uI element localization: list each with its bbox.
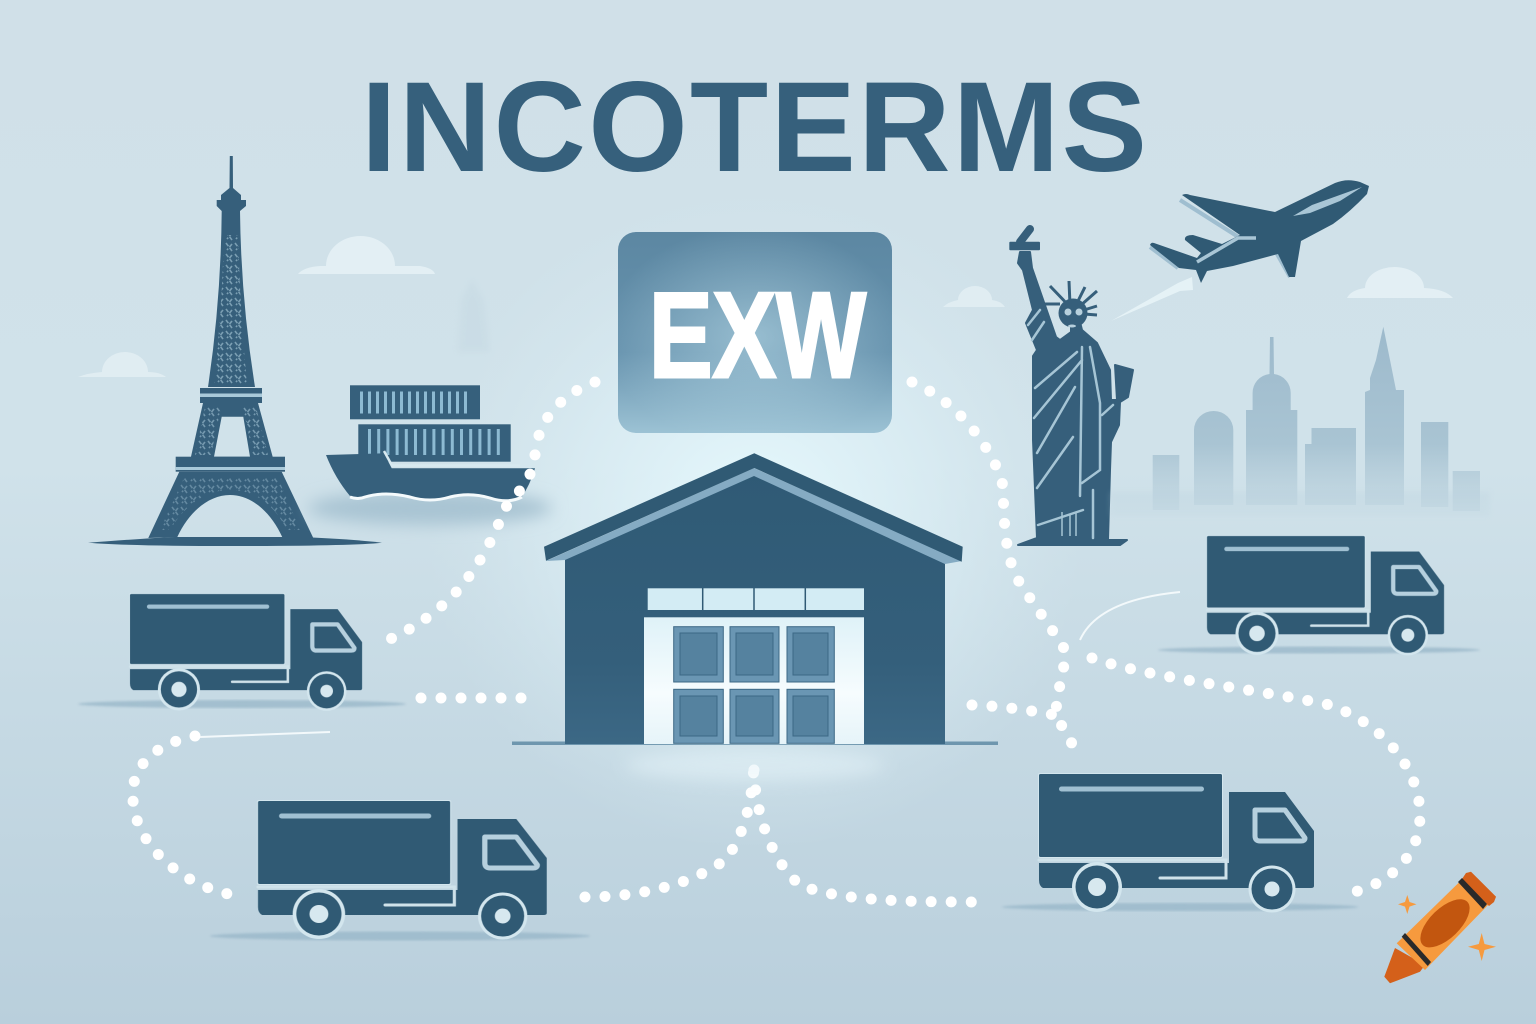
route: warehouse to bottom right xyxy=(754,770,985,902)
motion line: lower left xyxy=(200,732,330,737)
sparkle: small xyxy=(1398,895,1416,914)
title: INCOTERMS xyxy=(361,56,1147,199)
plane body xyxy=(1150,180,1369,283)
warehouse body xyxy=(565,470,945,744)
warehouse ground line xyxy=(512,742,998,745)
plane highlights xyxy=(1293,187,1362,216)
icon: container ship xyxy=(308,385,552,525)
crayon body xyxy=(1397,872,1496,970)
icon: Eiffel Tower xyxy=(88,156,382,546)
route: left truck to warehouse xyxy=(421,692,530,704)
truck: bottom left xyxy=(257,800,547,940)
plane light edge xyxy=(1150,200,1290,277)
EXW label: EXW xyxy=(649,267,867,403)
cloud: upper right xyxy=(1347,267,1453,298)
crayon oval xyxy=(1412,891,1478,956)
faint distant tower xyxy=(458,279,490,352)
cloud: far left xyxy=(78,352,166,377)
skyline xyxy=(1110,327,1490,516)
roof xyxy=(544,453,963,562)
cloud: center right xyxy=(943,286,1005,307)
roof light strip xyxy=(546,468,962,564)
warehouse glow below xyxy=(625,749,885,781)
route: right loop xyxy=(1092,658,1420,893)
contrail xyxy=(1111,277,1193,321)
truck: left xyxy=(129,593,362,711)
stacked crates xyxy=(674,627,834,743)
route: bottom left to warehouse xyxy=(585,765,754,897)
crayon band top xyxy=(1458,878,1487,909)
icon: airplane xyxy=(1111,180,1369,321)
icon: Statue of Liberty xyxy=(1009,229,1133,545)
bottom container xyxy=(358,424,511,462)
dotted routes xyxy=(133,382,1420,902)
cloud: upper left xyxy=(298,236,435,274)
sparkle: large xyxy=(1468,933,1496,961)
route: lower left loop xyxy=(133,736,240,896)
ship water shadow xyxy=(308,491,552,525)
EXW sign xyxy=(618,232,892,433)
route: sign to left truck xyxy=(388,382,595,640)
route: warehouse to junction xyxy=(972,705,1060,716)
crayon tip xyxy=(1384,948,1425,983)
motion line: upper right xyxy=(1080,592,1180,640)
truck: right xyxy=(1206,535,1444,655)
crayon cap band xyxy=(1462,872,1496,906)
top container xyxy=(350,385,480,419)
upper windows xyxy=(648,588,864,610)
crayon band bottom xyxy=(1402,933,1431,966)
icon: orange crayon xyxy=(1384,872,1496,983)
truck shadows xyxy=(78,646,1480,940)
ship hull xyxy=(326,453,535,501)
route: sign to right junction xyxy=(912,382,1079,752)
loading door xyxy=(644,617,864,744)
warehouse xyxy=(512,453,998,781)
truck: bottom right xyxy=(1038,773,1314,912)
